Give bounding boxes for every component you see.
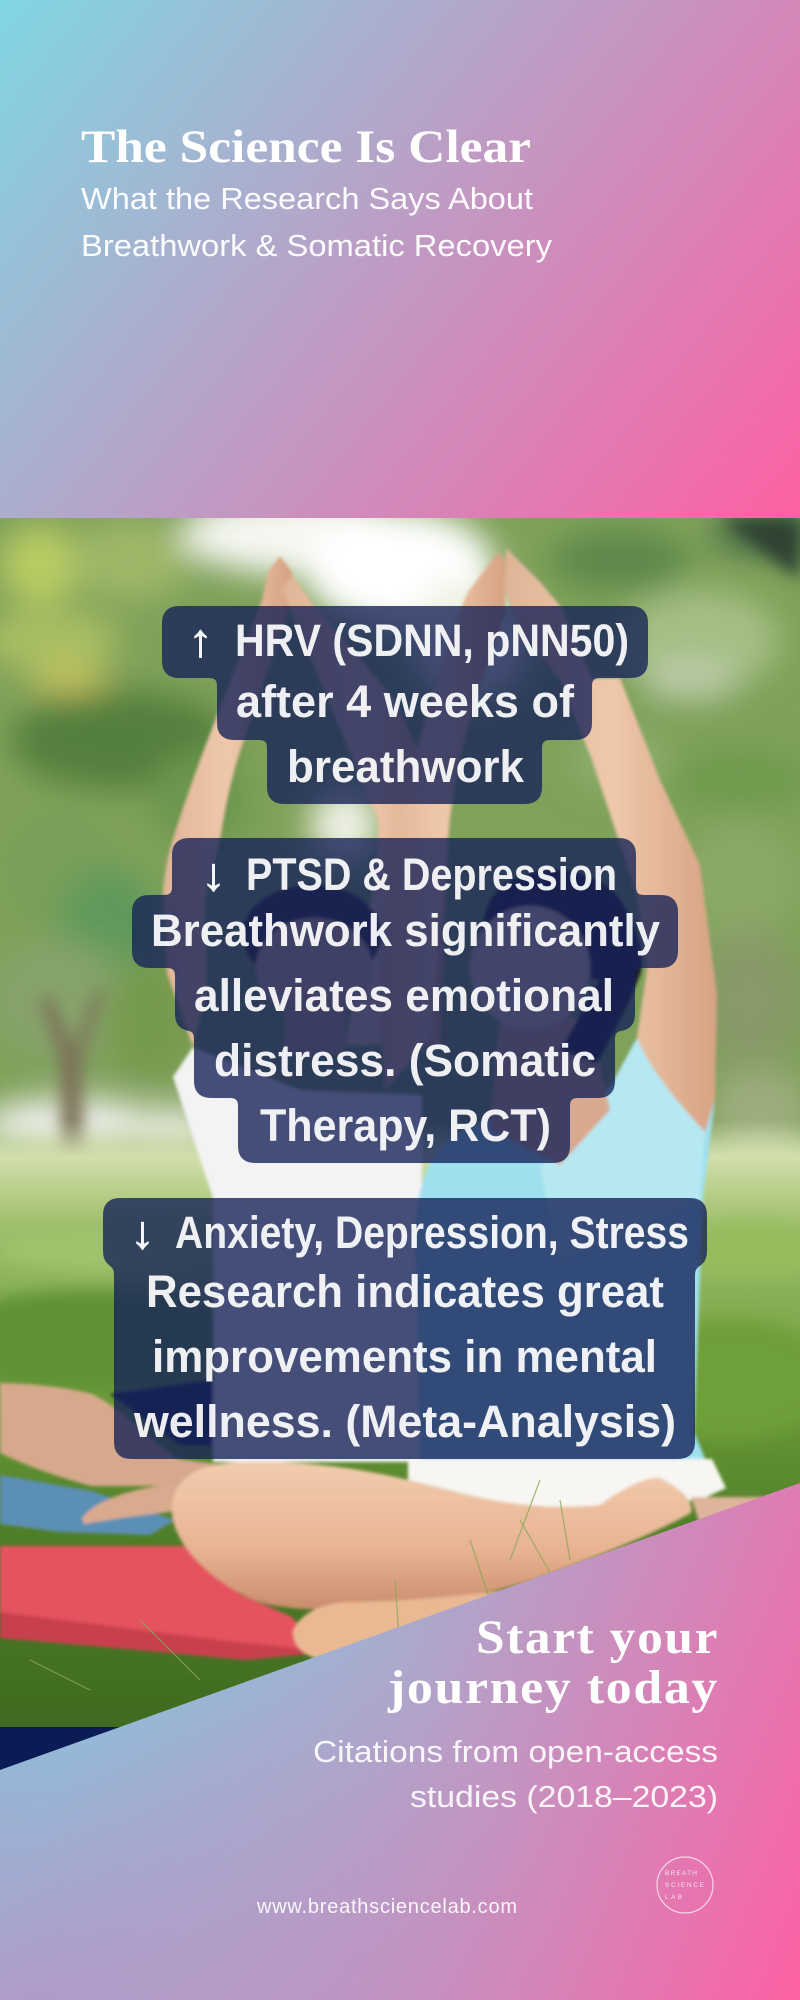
header title block: [81, 121, 553, 263]
background tree trunk: [40, 518, 800, 1180]
citations note: Citations from open-access: [313, 1734, 718, 1769]
photo: two people doing yoga in a park: [0, 495, 800, 1730]
card text: ↑: [188, 614, 213, 666]
woman: right arm: [505, 548, 717, 1132]
logo: Breath Science Lab: SCIENCE: [665, 1882, 705, 1889]
card text: Anxiety, Depression, Stress: [175, 1207, 689, 1258]
call to action heading: journey today: [387, 1661, 719, 1714]
citations note: studies (2018–2023): [410, 1779, 718, 1814]
woman: white shorts: [408, 1459, 726, 1518]
card text: ↓: [201, 848, 226, 900]
card text: wellness. (Meta-Analysis): [133, 1396, 676, 1447]
card text: distress. (Somatic: [214, 1035, 596, 1086]
woman: lower foot: [293, 1590, 510, 1665]
logo: Breath Science Lab: LAB: [665, 1894, 682, 1901]
card text: Research indicates great: [146, 1266, 664, 1317]
dark navy strip under photo: [0, 1727, 130, 1777]
card background: [132, 838, 678, 1163]
stat card 3: anxiety, depression, stress: [103, 1198, 707, 1459]
header gradient panel: [0, 0, 800, 518]
card text: Therapy, RCT): [260, 1100, 551, 1151]
red yoga mat: [0, 1544, 300, 1651]
woman: neck: [490, 1010, 610, 1165]
woman: T-shirt: [415, 1038, 715, 1470]
card background: [103, 1198, 707, 1459]
subtitle: [81, 181, 553, 263]
card text: [130, 1206, 689, 1447]
citations note: [313, 1734, 718, 1814]
woman: left arm: [381, 552, 505, 1090]
card text: Breathwork significantly: [151, 905, 660, 956]
woman: crossed legs: [172, 1462, 691, 1609]
man: leg and shorts: [0, 1381, 218, 1488]
subtitle: What the Research Says About: [81, 181, 533, 216]
subtitle: Breathwork & Somatic Recovery: [81, 228, 553, 263]
card background: [162, 606, 648, 804]
card text: HRV (SDNN, pNN50): [235, 615, 629, 666]
man: head: [244, 884, 382, 963]
card text: after 4 weeks of: [236, 676, 575, 727]
logo: Breath Science Lab: BREATH: [665, 1870, 697, 1877]
card text: breathwork: [287, 741, 525, 792]
title: The Science Is Clear: [81, 121, 531, 173]
card text: ↓: [130, 1206, 155, 1258]
card text: [151, 848, 660, 1151]
blue yoga mat: [0, 1475, 175, 1535]
card text: improvements in mental: [152, 1331, 657, 1382]
man: T-shirt: [173, 1047, 422, 1462]
call to action heading: Start your: [476, 1611, 719, 1664]
logo: Breath Science Lab: [657, 1857, 713, 1913]
card text: [188, 614, 629, 792]
diagonal footer panel: [0, 1483, 800, 2000]
stat card 1: HRV: [162, 606, 648, 804]
call to action heading: [387, 1611, 719, 1714]
woman: head: [470, 870, 642, 1064]
card text: PTSD & Depression: [246, 849, 617, 900]
website url: www.breathsciencelab.com: [256, 1896, 517, 1918]
man: raised left arm: [163, 556, 292, 1047]
grass blades: [30, 1480, 570, 1690]
man: raised right arm: [282, 575, 449, 1045]
card text: alleviates emotional: [194, 970, 614, 1021]
stat card 2: PTSD and depression: [132, 838, 678, 1163]
